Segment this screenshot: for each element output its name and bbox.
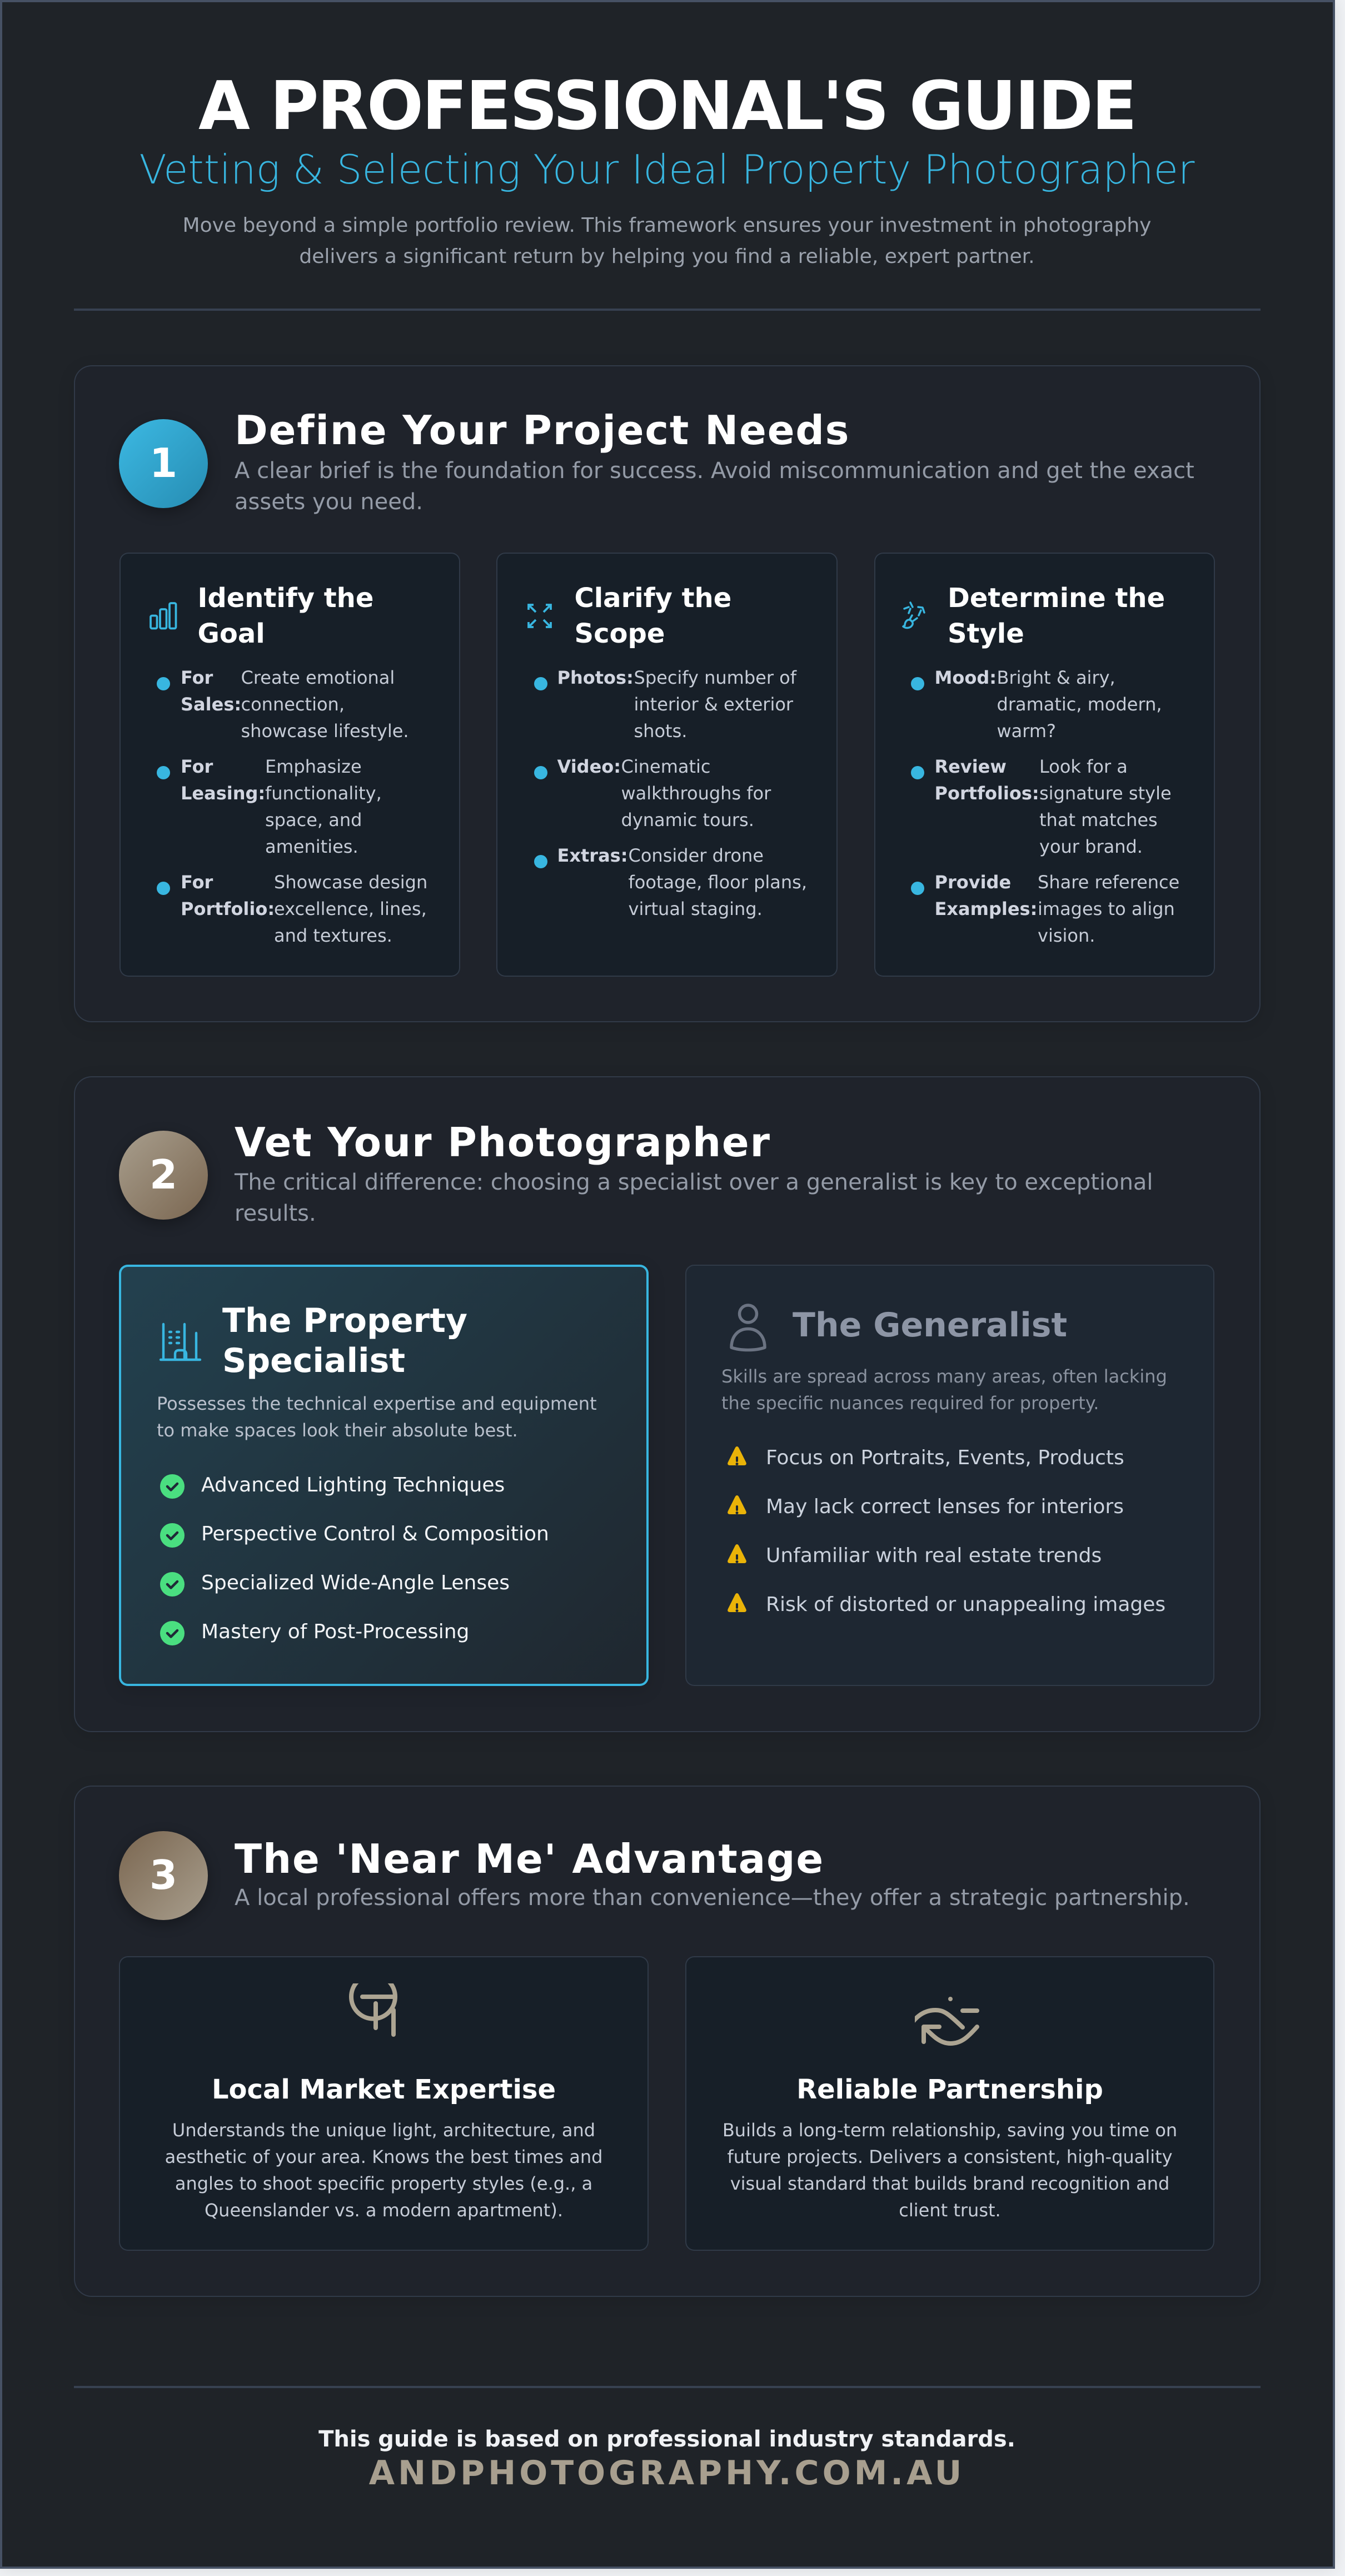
- list item: post-processing: [160, 1617, 605, 1650]
- bullet: for leasing: [157, 756, 382, 857]
- bullet: provide examples: [911, 872, 1179, 946]
- specialist description: [157, 1390, 597, 1443]
- section 2 description: results.: [235, 1201, 316, 1226]
- card heading: Identify the: [198, 583, 373, 614]
- list item: lenses: [725, 1490, 1170, 1524]
- card description: Understands the unique light, architecture, and: [172, 2120, 595, 2141]
- number badge 1: [119, 419, 208, 508]
- bullet: review portfolios: signature style: [1039, 783, 1172, 804]
- card heading: Local Market Expertise: [212, 2074, 556, 2105]
- bullet: extras: Consider drone: [628, 845, 764, 866]
- panel: section 1 define your project needs: [74, 365, 1261, 1022]
- intro text: [183, 214, 1151, 268]
- bullet: review portfolios: [911, 756, 1172, 857]
- list item: focus: Focus on Portraits, Events, Products: [766, 1446, 1124, 1469]
- bullet: for portfolio: Showcase design: [274, 872, 427, 893]
- specialist heading: The Property: [222, 1301, 467, 1340]
- panel: the property specialist: [119, 1265, 649, 1686]
- bullet: video: [534, 756, 771, 831]
- panel: the generalist: [685, 1265, 1214, 1686]
- generalist heading: The Generalist: [793, 1306, 1067, 1345]
- card heading: Clarify the: [575, 583, 731, 614]
- bullet: for sales: [157, 667, 409, 742]
- footer: [74, 2424, 1261, 2493]
- list item: advanced lighting: Advanced Lighting Techniques: [201, 1474, 505, 1496]
- generalist description: Skills are spread across many areas, often lacking: [721, 1366, 1167, 1387]
- bullet: review portfolios: that matches: [1039, 809, 1158, 831]
- specialist heading: [222, 1301, 467, 1381]
- icon: building: [159, 1323, 201, 1361]
- list item: trends: [725, 1539, 1170, 1573]
- number badge 3: [119, 1831, 208, 1920]
- section 1 description: assets you need.: [235, 489, 423, 515]
- section 1 heading: Define Your Project Needs: [235, 407, 850, 454]
- section 2 heading: Vet Your Photographer: [235, 1119, 771, 1166]
- bullet: for leasing: Emphasize: [265, 756, 362, 777]
- card: determine the style: [874, 553, 1215, 977]
- bullet: provide examples: Share reference: [1038, 872, 1179, 893]
- list item: wide-angle lenses: [160, 1568, 605, 1601]
- bullet: for sales: Create emotional: [241, 667, 395, 688]
- bullet: for sales: connection,: [241, 694, 345, 715]
- bullet: mood: Mood:: [935, 667, 997, 688]
- section 1 description: A clear brief is the foundation for success. Avoid miscommunication and get the exact: [235, 458, 1194, 484]
- list item: post-processing: Mastery of Post-Processing: [201, 1620, 469, 1643]
- number badge 1: 1: [150, 440, 177, 486]
- list item: wide-angle lenses: Specialized Wide-Angle Lenses: [201, 1572, 510, 1594]
- card: identify the goal: [119, 553, 460, 977]
- bullet: extras: Extras:: [557, 845, 628, 866]
- card heading: Scope: [575, 618, 665, 649]
- bullet: review portfolios: Portfolios:: [935, 783, 1039, 804]
- card description: [685, 2117, 1214, 2224]
- bullet: for portfolio: [157, 872, 427, 946]
- bullet: video: walkthroughs for: [621, 783, 771, 804]
- bullet: for portfolio: For: [181, 872, 213, 893]
- bullet: video: dynamic tours.: [621, 809, 754, 831]
- icon: bar chart: [150, 602, 177, 629]
- list item: perspective control: [160, 1519, 605, 1552]
- bullet: video: Cinematic: [621, 756, 711, 777]
- intro text: delivers a significant return by helping you find a reliable, expert partner.: [299, 245, 1035, 268]
- number badge 2: 2: [150, 1151, 177, 1198]
- section 1 description: [235, 458, 1194, 515]
- list item: distortion: Risk of distorted or unappealing images: [766, 1593, 1165, 1616]
- bullet: video: Video:: [557, 756, 621, 777]
- icon: partnership cycle: [915, 1995, 983, 2047]
- bullet: review portfolios: Look for a: [1039, 756, 1128, 777]
- bullet: review portfolios: your brand.: [1039, 836, 1143, 857]
- section 3 heading: The 'Near Me' Advantage: [235, 1836, 824, 1882]
- section 2 description: [235, 1170, 1153, 1226]
- bullet: provide examples: vision.: [1038, 925, 1095, 946]
- title: A PROFESSIONAL'S GUIDE: [198, 68, 1135, 145]
- number badge 2: [119, 1131, 208, 1220]
- bullet: for leasing: For: [181, 756, 213, 777]
- bullet: photos: shots.: [634, 720, 687, 742]
- card: clarify the scope: [496, 553, 838, 977]
- icon: expand arrows: [527, 604, 552, 628]
- bullet: for portfolio: and textures.: [274, 925, 392, 946]
- card description: visual standard that builds brand recognition and: [730, 2173, 1169, 2194]
- number badge 3: 3: [150, 1852, 177, 1898]
- footer brand: ANDPHOTOGRAPHY.COM.AU: [369, 2454, 965, 2493]
- bullet: photos: Photos:: [557, 667, 634, 688]
- panel: section 3 near me advantage: [74, 1786, 1261, 2297]
- specialist description: Possesses the technical expertise and equipment: [157, 1393, 597, 1414]
- specialist heading: Specialist: [222, 1341, 405, 1380]
- card heading: [948, 583, 1165, 649]
- header: [140, 68, 1195, 268]
- card description: aesthetic of your area. Knows the best times and: [165, 2146, 602, 2167]
- bullet: review portfolios: Review: [935, 756, 1007, 777]
- list item: advanced lighting: [160, 1470, 605, 1503]
- bullet: photos: [534, 667, 797, 742]
- bullet: provide examples: images to align: [1038, 898, 1175, 919]
- card heading: Reliable Partnership: [796, 2074, 1103, 2105]
- list item: focus: [725, 1441, 1170, 1475]
- generalist description: the specific nuances required for property.: [721, 1393, 1099, 1414]
- card description: Queenslander vs. a modern apartment).: [205, 2200, 563, 2221]
- bullet: mood: dramatic, modern,: [997, 694, 1162, 715]
- subtitle: Vetting & Selecting Your Ideal Property Photographer: [140, 146, 1194, 193]
- card: local market expertise: [119, 1956, 649, 2251]
- bullet: mood: [911, 667, 1162, 742]
- list item: distortion: [725, 1588, 1170, 1622]
- bullet: for portfolio: excellence, lines,: [274, 898, 427, 919]
- intro text: Move beyond a simple portfolio review. This framework ensures your investment in photography: [183, 214, 1151, 237]
- bullet: for leasing: functionality,: [265, 783, 382, 804]
- bullet: for sales: Sales:: [181, 694, 241, 715]
- card description: [119, 2117, 649, 2224]
- footer note: This guide is based on professional industry standards.: [318, 2426, 1015, 2452]
- list item: perspective control: Perspective Control & Composition: [201, 1523, 549, 1545]
- section 3 description: A local professional offers more than convenience—they offer a strategic partnership.: [235, 1885, 1190, 1911]
- bullet: for leasing: Leasing:: [181, 783, 265, 804]
- card heading: [575, 583, 731, 649]
- icon: person: [727, 1301, 769, 1353]
- icon: location market: [345, 1983, 400, 2039]
- card heading: Determine the: [948, 583, 1165, 614]
- section 2 description: The critical difference: choosing a specialist over a generalist is key to exceptional: [235, 1170, 1153, 1195]
- bullet: extras: footage, floor plans,: [628, 872, 807, 893]
- bullet: mood: warm?: [997, 720, 1056, 742]
- card description: client trust.: [899, 2200, 1001, 2221]
- bullet: for sales: showcase lifestyle.: [241, 720, 409, 742]
- bullet: provide examples: Examples:: [935, 898, 1037, 919]
- list item: lenses: May lack correct lenses for interiors: [766, 1495, 1124, 1518]
- bullet: extras: virtual staging.: [628, 898, 763, 919]
- bullet: for sales: For: [181, 667, 213, 688]
- card heading: Goal: [198, 618, 265, 649]
- panel: section 2 vet your photographer: [74, 1076, 1261, 1732]
- card: reliable partnership: [685, 1956, 1214, 2251]
- card heading: Style: [948, 618, 1024, 649]
- specialist description: to make spaces look their absolute best.: [157, 1420, 518, 1441]
- bullet: for leasing: amenities.: [265, 836, 358, 857]
- card description: future projects. Delivers a consistent, high-quality: [727, 2146, 1173, 2167]
- card description: Builds a long-term relationship, saving you time on: [723, 2120, 1177, 2141]
- bullet: for leasing: space, and: [265, 809, 362, 831]
- card heading: [198, 583, 373, 649]
- bullet: photos: interior & exterior: [634, 694, 793, 715]
- list item: trends: Unfamiliar with real estate trends: [766, 1544, 1102, 1567]
- card description: angles to shoot specific property styles (e.g., a: [175, 2173, 592, 2194]
- bullet: photos: Specify number of: [634, 667, 796, 688]
- bullet: extras: [534, 845, 807, 919]
- bullet: mood: Bright & airy,: [997, 667, 1115, 688]
- icon: paintbrush: [902, 601, 925, 629]
- bullet: provide examples: Provide: [935, 872, 1011, 893]
- generalist description: [721, 1363, 1167, 1416]
- bullet: for portfolio: Portfolio:: [181, 898, 275, 919]
